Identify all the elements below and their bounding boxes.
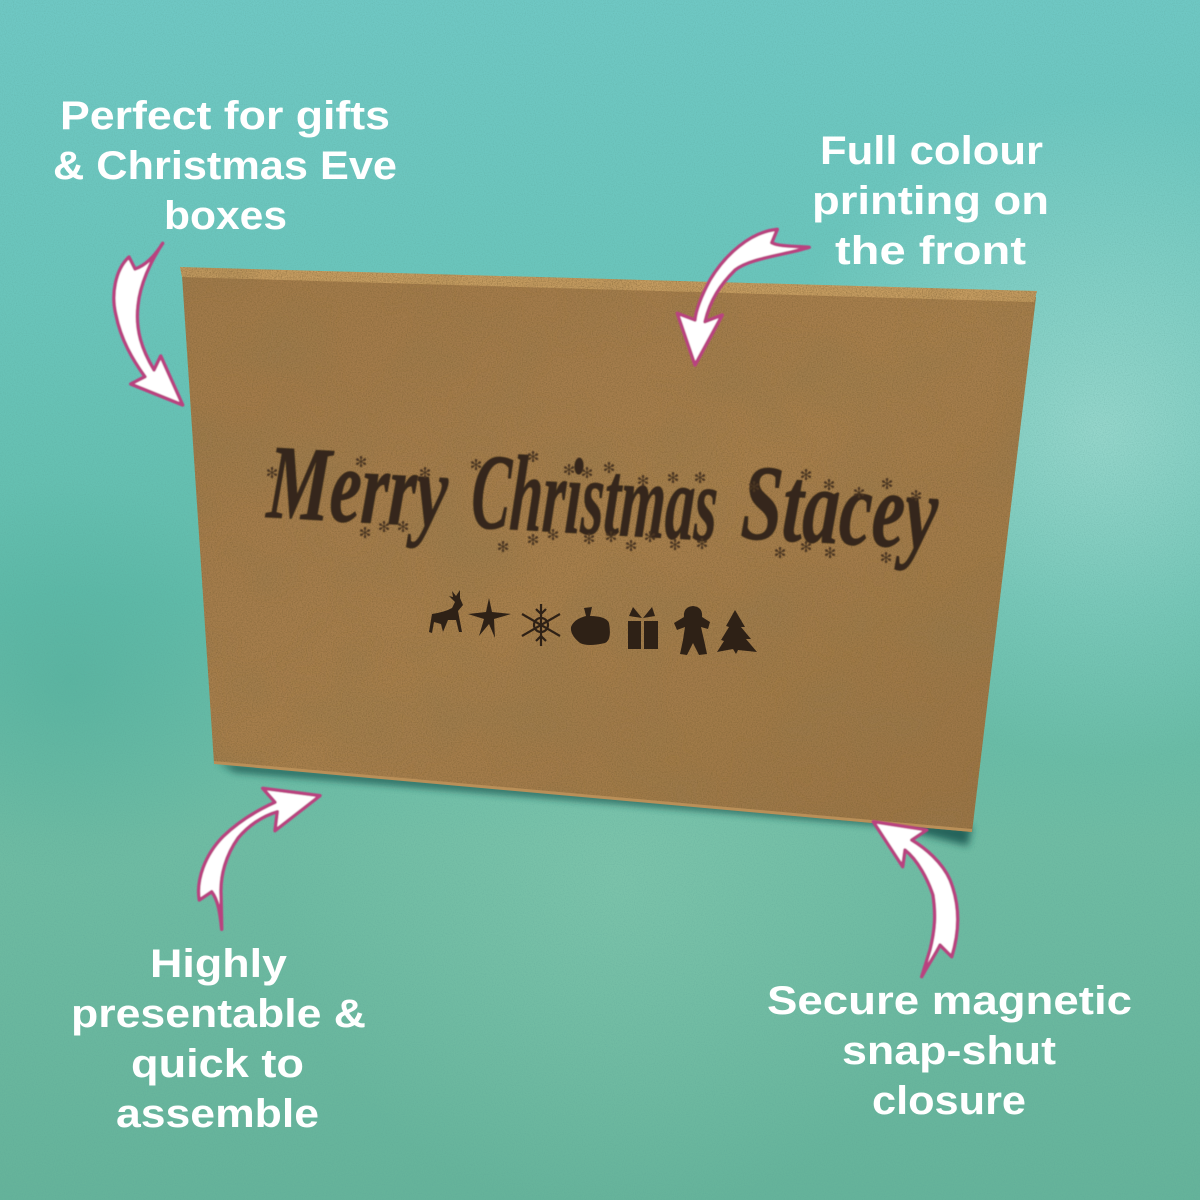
- callout text: highly presentable: assemble: [116, 1092, 319, 1136]
- snowflakes around the message: ✻: [823, 476, 835, 494]
- snowflakes around the message: ✻: [644, 528, 656, 546]
- snowflakes around the message: ✻: [527, 448, 539, 466]
- snowflakes around the message: ✻: [800, 538, 812, 556]
- snowflakes around the message: ✻: [359, 524, 371, 542]
- callout text: highly presentable: Highly: [150, 942, 288, 986]
- snowflakes around the message: ✻: [355, 453, 367, 471]
- snowflakes around the message: ✻: [853, 484, 865, 502]
- callout text: highly presentable: quick to: [131, 1042, 304, 1086]
- snowflakes around the message: ✻: [547, 526, 559, 544]
- snowflakes around the message: ✻: [378, 518, 390, 536]
- snowflakes around the message: [266, 448, 922, 567]
- box printed message: Merry Christmas Stacey: Merry: [263, 423, 452, 550]
- icon: star: [468, 598, 511, 638]
- callout text: perfect for gifts: [53, 94, 397, 238]
- box front panel: [182, 275, 1036, 832]
- icon: reindeer: [429, 590, 463, 633]
- icon: Christmas tree: [717, 610, 757, 654]
- icon: snowflake: [522, 604, 560, 646]
- snowflakes around the message: ✻: [563, 461, 575, 479]
- callout text: full colour printing: printing on: [812, 179, 1049, 223]
- snowflakes around the message: ✻: [581, 464, 593, 482]
- snowflakes around the message: ✻: [774, 544, 786, 562]
- snowflakes around the message: ✻: [694, 469, 706, 487]
- snowflakes around the message: ✻: [470, 456, 482, 474]
- snowflakes around the message: ✻: [910, 487, 922, 505]
- arrow: printing callout pointing at box front: [677, 229, 809, 365]
- snowflakes around the message: ✻: [603, 459, 615, 477]
- row of Christmas icons: [429, 590, 757, 655]
- snowflakes around the message: ✻: [583, 530, 595, 548]
- snowflakes around the message: ✻: [637, 472, 649, 490]
- snowflakes around the message: ✻: [397, 518, 409, 536]
- snowflakes around the message: ✻: [880, 549, 892, 567]
- callout text: full colour printing: the front: [835, 229, 1026, 273]
- callout text: full colour printing: [812, 129, 1049, 273]
- callout text: secure magnetic closure: [767, 979, 1132, 1123]
- callout text: secure magnetic closure: Secure magnetic: [767, 979, 1132, 1023]
- icon: gift sack: [571, 607, 610, 645]
- box shadow on the floor: [218, 762, 972, 846]
- callout text: secure magnetic closure: snap-shut: [842, 1029, 1056, 1073]
- arrow: gifts callout pointing at box left side: [114, 243, 183, 405]
- arrow: presentable callout pointing at box base: [199, 788, 320, 929]
- callout text: perfect for gifts: & Christmas Eve: [53, 144, 397, 188]
- box bottom edge highlight: [214, 761, 972, 832]
- snowflakes around the message: ✻: [419, 464, 431, 482]
- box printed message: Merry Christmas Stacey: [263, 423, 942, 573]
- callout text: highly presentable: presentable &: [71, 992, 366, 1036]
- snowflakes around the message: ✻: [824, 544, 836, 562]
- snowflakes around the message: ✻: [800, 466, 812, 484]
- kraft gift box: [180, 267, 1037, 832]
- snowflakes around the message: ✻: [696, 535, 708, 553]
- snowflakes around the message: ✻: [266, 464, 278, 482]
- arrow: magnetic closure callout pointing at box corner: [873, 822, 958, 977]
- snowflakes around the message: ✻: [625, 537, 637, 555]
- callout text: secure magnetic closure: closure: [872, 1079, 1026, 1123]
- callout text: highly presentable: [71, 942, 366, 1136]
- box printed message: Merry Christmas Stacey: Stacey: [739, 443, 942, 573]
- snowflakes around the message: ✻: [497, 538, 509, 556]
- icon: gingerbread man: [674, 606, 710, 655]
- snowflakes around the message: ✻: [881, 475, 893, 493]
- callout text: perfect for gifts: boxes: [164, 194, 287, 238]
- snowflakes around the message: ✻: [605, 528, 617, 546]
- snowflakes around the message: ✻: [527, 531, 539, 549]
- box top edge: [180, 267, 1037, 302]
- icon: wrapped present: [628, 607, 658, 649]
- snowflakes around the message: ✻: [667, 469, 679, 487]
- snowflakes around the message: ✻: [669, 536, 681, 554]
- snowflakes around the message: ✻: [748, 478, 760, 496]
- box printed message: Merry Christmas Stacey: Christmas: [469, 432, 721, 565]
- callout text: perfect for gifts: Perfect for gifts: [60, 94, 390, 138]
- callout text: full colour printing: Full colour: [820, 129, 1043, 173]
